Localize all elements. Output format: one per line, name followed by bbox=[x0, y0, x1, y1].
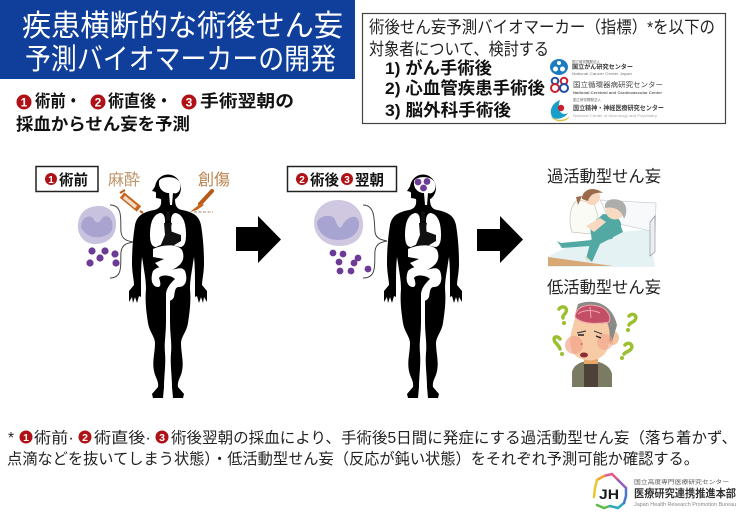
illustration: confused elderly man with brain bbox=[554, 302, 636, 387]
brain inflammation dots bbox=[415, 178, 430, 191]
logo: National Cerebral and Cardiovascular Center: National Cerebral and Cardiovascular Center bbox=[573, 90, 662, 95]
logo: National Cancer Center: National Cancer Center Japan bbox=[572, 71, 632, 76]
panel heading text bbox=[369, 18, 715, 59]
subheading: blood sampling timing: 採血からせん妄を予測 bbox=[16, 115, 190, 134]
footnote text: 3 bbox=[159, 432, 165, 444]
logo text: organisation name bbox=[634, 478, 736, 508]
subheading: blood sampling timing: 術直後・ bbox=[108, 91, 172, 111]
footnote text bbox=[7, 429, 737, 468]
human body with organs, post-surgery bbox=[384, 174, 462, 398]
logo: National Cerebral and Cardiovascular Center: 国立循環器病研究センター bbox=[573, 80, 663, 89]
logo: National Cerebral and Cardiovascular Center bbox=[551, 78, 663, 95]
logo: National Cancer Center: 国立研究開発法人 bbox=[572, 59, 600, 64]
label: anesthesia: 麻酔 bbox=[108, 171, 140, 189]
footnote text: 点滴などを抜いてしまう状態）・低活動型せん妄（反応が鈍い状態）をそれぞれ予測可能か確認する。 bbox=[7, 450, 699, 468]
list of surgeries bbox=[385, 58, 545, 120]
immune cell, post-surgery bbox=[314, 200, 363, 246]
heading: hyperactive delirium: 過活動型せん妄 bbox=[547, 167, 661, 186]
subheading: blood sampling timing bbox=[16, 91, 294, 134]
footnote text: 術前· bbox=[34, 429, 74, 447]
footnote text: 1 bbox=[23, 432, 29, 444]
panel: target populations bbox=[362, 14, 726, 124]
subheading: blood sampling timing: 1 bbox=[21, 96, 28, 110]
panel heading text: 対象者について、検討する bbox=[369, 40, 549, 59]
list of surgeries: 2) 心血管疾患手術後 bbox=[385, 78, 545, 98]
cytokine dots, post-surgery bbox=[330, 250, 371, 274]
label: after surgery and next morning bbox=[288, 166, 396, 192]
label: before surgery: 術前 bbox=[59, 171, 88, 189]
title banner: 疾患横断的な術後せん妄 bbox=[22, 10, 343, 43]
logo: National Center of Neurology and Psychiatry: National Center of Neurology and Psychiatry bbox=[573, 114, 657, 118]
list of surgeries: 1) がん手術後 bbox=[385, 58, 492, 78]
subheading: blood sampling timing: 2 bbox=[95, 96, 102, 110]
title banner bbox=[0, 0, 355, 79]
list of surgeries: 3) 脳外科手術後 bbox=[385, 100, 511, 120]
label: after surgery and next morning: 術後 bbox=[310, 171, 339, 189]
brace, post-surgery bbox=[363, 205, 387, 278]
question marks bbox=[554, 307, 636, 354]
brace, pre-surgery bbox=[110, 205, 133, 278]
label: before surgery: 1 bbox=[48, 175, 54, 186]
label: after surgery and next morning: 翌朝 bbox=[355, 171, 384, 189]
heading: hypoactive delirium: 低活動型せん妄 bbox=[547, 278, 661, 297]
label: before surgery bbox=[36, 166, 98, 192]
label: after surgery and next morning: 3 bbox=[344, 175, 350, 186]
panel heading text: 術後せん妄予測バイオマーカー（指標）*を以下の bbox=[369, 18, 715, 37]
icon: scalpel bbox=[190, 191, 213, 212]
subheading: blood sampling timing: 術前・ bbox=[35, 92, 81, 111]
label: surgical wound: 創傷 bbox=[198, 171, 230, 189]
footnote text: 2 bbox=[82, 432, 88, 444]
logo: National Center of Neurology and Psychiatry: 国立精神・神経医療研究センター bbox=[573, 103, 664, 112]
footnote text: 術直後· bbox=[94, 429, 151, 447]
title banner: 予測バイオマーカーの開発 bbox=[25, 43, 336, 76]
subheading: blood sampling timing: 手術翌朝の bbox=[200, 91, 294, 111]
logo: National Cancer Center: 国立がん研究センター bbox=[572, 63, 633, 71]
logo: National Cancer Center bbox=[550, 59, 633, 76]
logo text: organisation name: 国立高度専門医療研究センター bbox=[634, 478, 729, 486]
subheading: blood sampling timing: 3 bbox=[186, 96, 193, 110]
label: after surgery and next morning: 2 bbox=[299, 175, 305, 186]
footnote text: * bbox=[8, 430, 14, 447]
logo: Japan Health Research Promotion Bureau: JH bbox=[599, 486, 619, 502]
footnote text: 術後翌朝の採血により、手術後5日間に発症にする過活動型せん妄（落ち着かず、 bbox=[171, 429, 737, 447]
logo text: organisation name: Japan Health Research Promotion Bureau bbox=[634, 502, 736, 508]
immune cell, pre-surgery bbox=[78, 206, 116, 244]
logo: National Center of Neurology and Psychiatry bbox=[550, 97, 664, 121]
cytokine dots, pre-surgery bbox=[86, 247, 120, 267]
arrow: to delirium outcomes bbox=[477, 216, 523, 263]
illustration: nurse restraining patient in bed bbox=[548, 189, 656, 267]
arrow: to post-surgery bbox=[236, 216, 281, 263]
icon: syringe bbox=[120, 190, 143, 213]
logo: National Center of Neurology and Psychiatry: 国立研究開発法人 bbox=[573, 97, 601, 102]
human body with organs, pre-surgery bbox=[129, 174, 207, 398]
logo: Japan Health Research Promotion Bureau bbox=[594, 474, 626, 508]
